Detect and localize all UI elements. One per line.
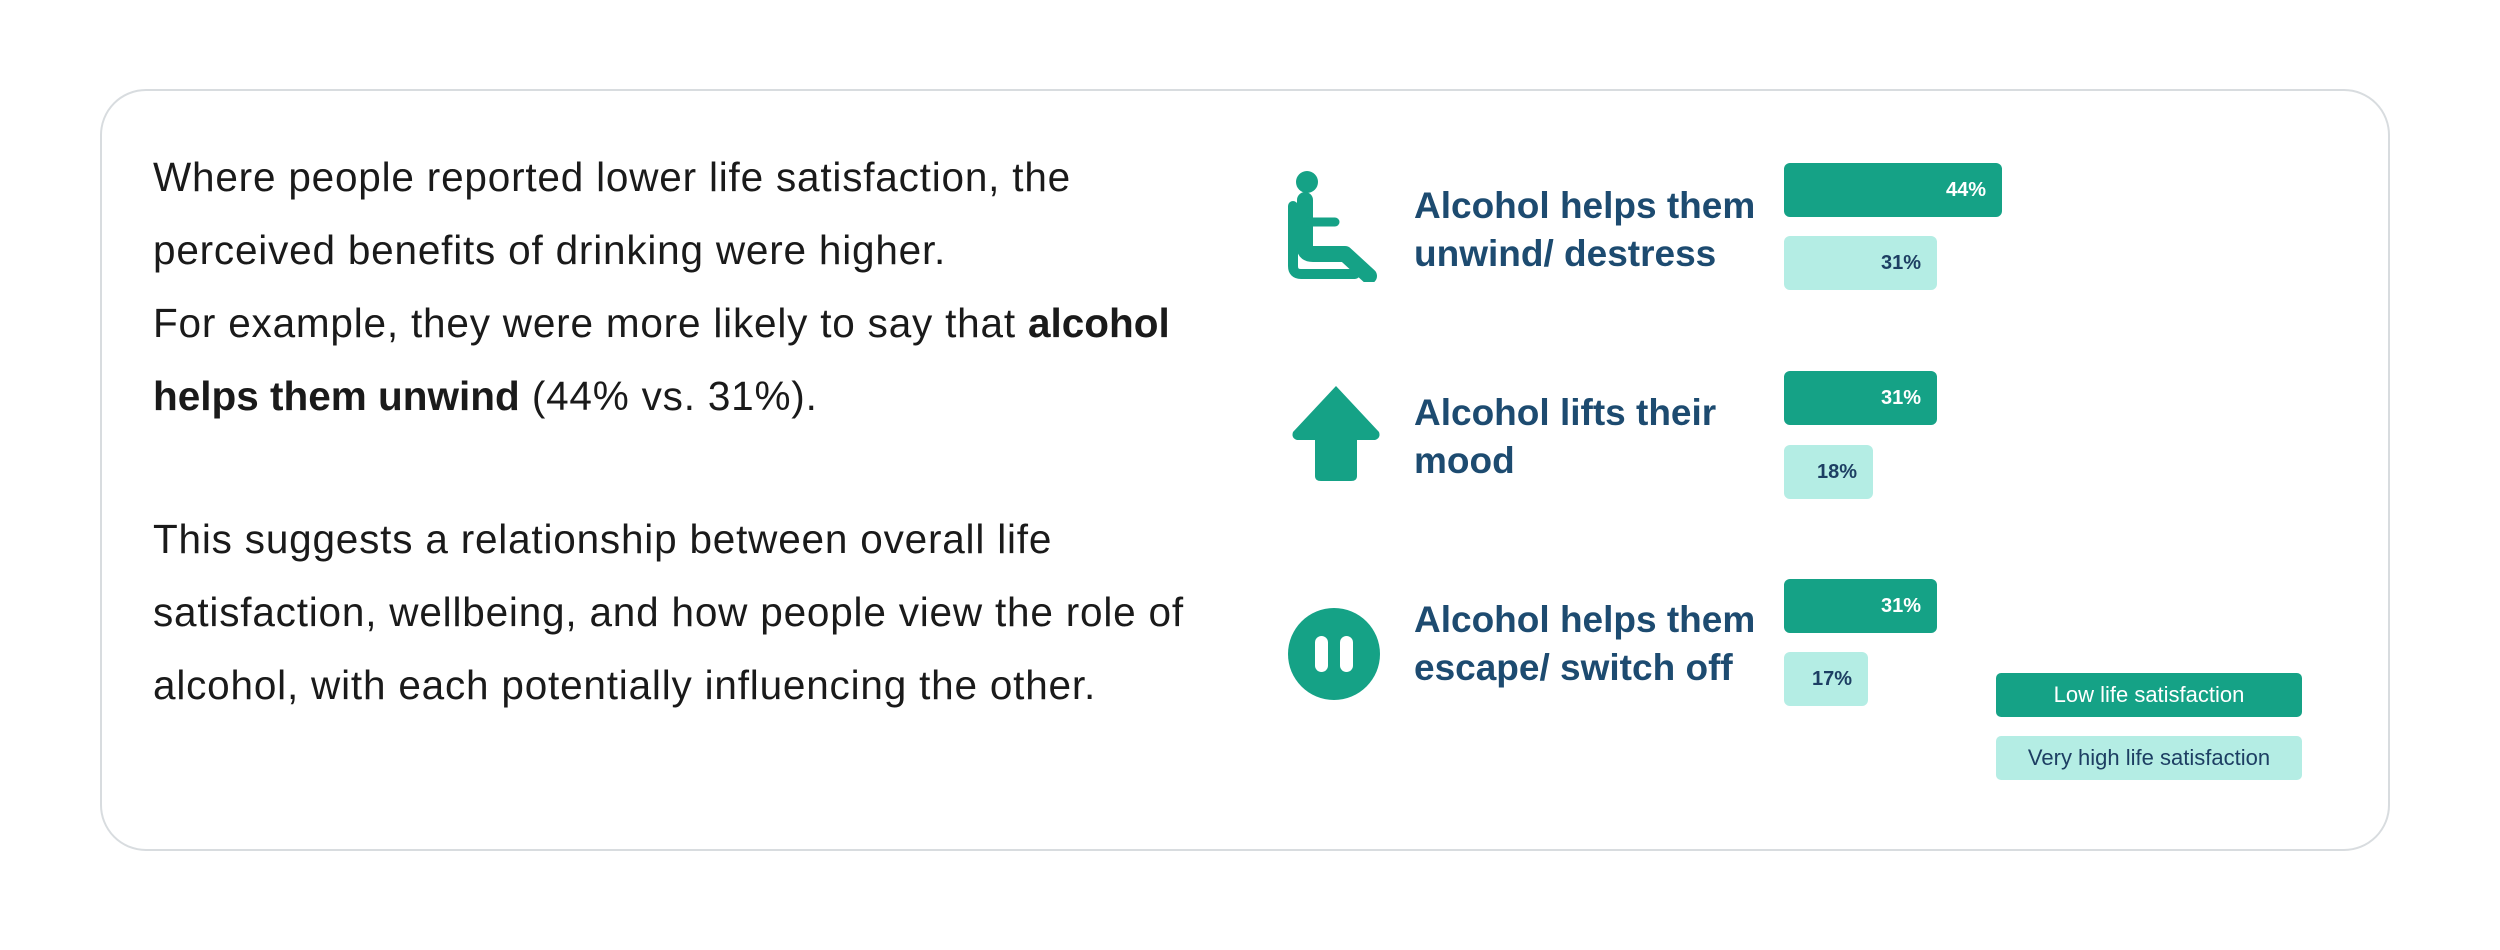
bar: mood high 18% [1784,445,1873,499]
bar: unwind low 44% [1784,163,2002,217]
label: escape: Alcohol helps them [1414,599,1755,640]
label: lifts mood: mood [1414,440,1515,481]
text block: paragraph 2: This suggests a relationship between overall life [153,516,1052,562]
bar: mood low 31%: 31% [1881,387,1921,409]
bar: mood low 31% [1784,371,1937,425]
bar: escape high 17%: 17% [1812,668,1852,690]
label: escape [1414,599,1755,688]
legend: low: Low life satisfaction [2054,682,2244,707]
legend: very high: Very high life satisfaction [2028,745,2270,770]
text block: paragraph 1: For example, they were more likely to say that alcohol [153,300,1170,346]
text block: paragraph 2: satisfaction, wellbeing, and how people view the role of [153,589,1184,635]
text block: paragraph 1: Where people reported lower life satisfaction, the [153,154,1071,200]
legend: very high [1996,736,2302,780]
label: unwind [1414,185,1755,274]
label: unwind: unwind/ destress [1414,233,1716,274]
bar: unwind high 31% [1784,236,1937,290]
icon: seated person [1288,171,1377,282]
bar: unwind low 44%: 44% [1946,179,1986,201]
text block: paragraph 2: alcohol, with each potentially influencing the other. [153,662,1096,708]
text block: paragraph 1 [153,154,1170,419]
legend: low [1996,673,2302,717]
label: lifts mood: Alcohol lifts their [1414,392,1716,433]
bar: mood high 18%: 18% [1817,461,1857,483]
label: unwind: Alcohol helps them [1414,185,1755,226]
bar: escape low 31%: 31% [1881,595,1921,617]
bar chart [1784,163,2002,706]
bar: escape high 17% [1784,652,1868,706]
panel card [100,89,2390,851]
bar: escape low 31% [1784,579,1937,633]
text block: paragraph 1: perceived benefits of drinking were higher. [153,227,946,273]
icon: up arrow [1292,386,1380,481]
icon: pause circle [1288,608,1380,700]
legend [1996,673,2302,780]
text block: paragraph 2 [153,516,1184,708]
label: lifts mood [1414,392,1716,481]
text block: paragraph 1: helps them unwind (44% vs. 31%). [153,373,818,419]
bar: unwind high 31%: 31% [1881,252,1921,274]
label: escape: escape/ switch off [1414,647,1733,688]
